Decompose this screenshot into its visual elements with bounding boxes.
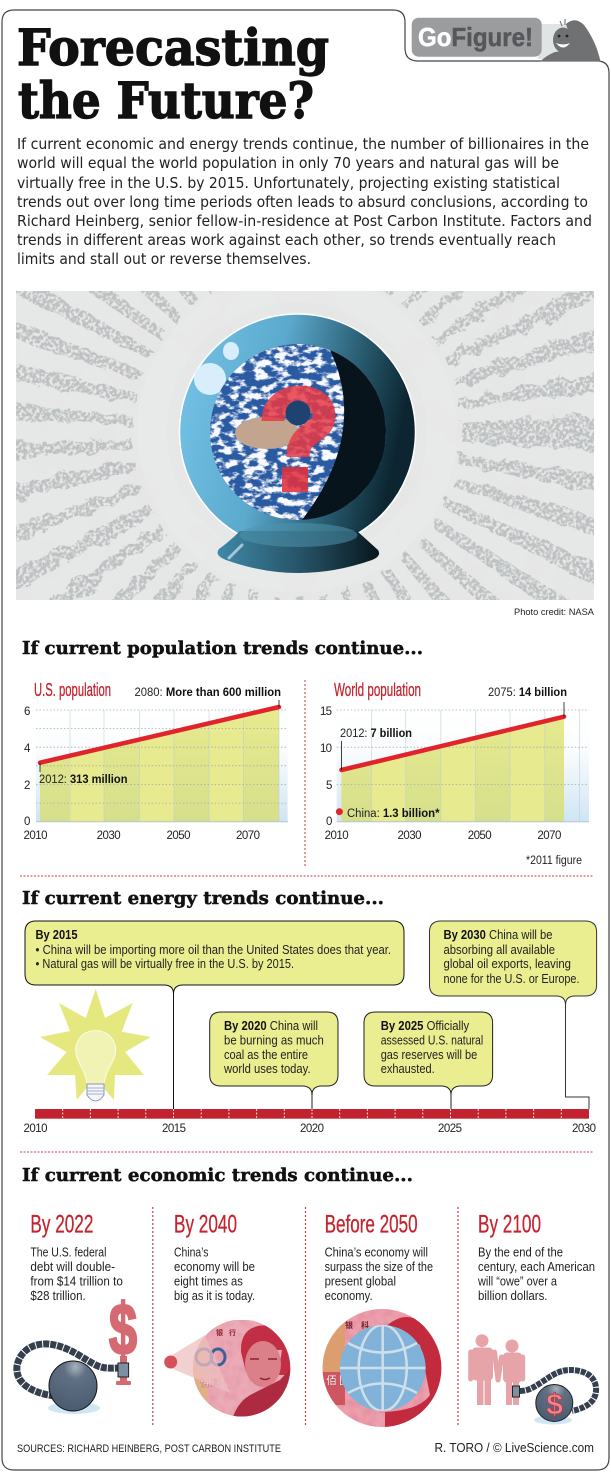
axis labels [320,706,561,842]
heading: energy: If current energy trends continue... [22,888,384,909]
panel: Before 2050: China’s economy will [325,1246,428,1260]
callout: By 2030: absorbing all available [444,943,555,957]
axis labels: 2030 [97,830,121,842]
panel: Before 2050: surpass the size of the [325,1260,433,1274]
axis labels: 2050 [166,830,190,842]
icon: globe on yuan: 佰圆 [326,1374,350,1387]
icon: light bulb [40,989,151,1101]
panel: By 2040: big as it is today. [174,1289,255,1303]
photo: crystal ball with Earth [16,291,594,600]
callout: By 2015: By 2015 [36,928,78,942]
icon: yuan magnifier: 佰圆 [200,1377,220,1388]
axis labels: 0 [24,816,30,828]
intro text block [17,135,592,268]
sources: SOURCES: RICHARD HEINBERG, POST CARBON INSTITUTE [17,1443,281,1455]
axis labels: 4 [24,743,31,755]
callout: By 2030: global oil exports, leaving [444,957,571,971]
panel: By 2022: debt will double- [30,1260,115,1274]
panel: By 2100: By 2100 [478,1211,541,1239]
panel: By 2040: By 2040 [174,1211,237,1239]
axis labels: 2030 [398,830,422,842]
callout: By 2030 [430,921,597,1109]
timeline labels: 2015 [162,1123,186,1135]
panel: Before 2050 [322,1211,442,1428]
panel: By 2100: century, each American [478,1260,595,1274]
badge: GoFigure logo [412,18,600,62]
chart title: U.S. population [34,680,111,700]
axis labels: 2010 [325,830,349,842]
panel: By 2100 [471,1211,596,1424]
callout: By 2015: • Natural gas will be virtually free in the U.S. by 2015. [36,957,294,971]
panel: By 2022: from $14 trillion to [30,1275,123,1289]
panel: By 2100: billion dollars. [478,1289,548,1303]
callout: By 2020: be burning as much [224,1034,324,1048]
earth [210,340,395,525]
panel: By 2100: will “owe” over a [477,1275,557,1289]
crystal ball base [218,523,379,573]
timeline labels: 2010 [24,1123,48,1135]
timeline labels: 2030 [572,1123,596,1135]
icon: dollar sign [109,1290,137,1385]
chart title: World population [334,680,421,700]
callout: By 2020: By 2020 China will [224,1019,318,1033]
callout: By 2030: none for the U.S. or Europe. [444,972,580,986]
timeline [24,1109,596,1135]
callout 2012: 2012: 313 million [39,774,128,786]
panel: Before 2050: present global [325,1275,396,1289]
axis labels: 0 [326,816,332,828]
callout China: China: 1.3 billion* [347,808,440,820]
panel: By 2040: economy will be [174,1260,255,1274]
callout 2080: 2080: More than 600 million [134,687,281,699]
chart: U.S. population [24,680,288,842]
title [17,18,329,130]
axis labels: 2070 [236,830,260,842]
icon: yuan magnifier [164,1320,291,1420]
icon: ball and chain with dollar [512,1370,596,1424]
callout: By 2015: • China will be importing more oil than the United States does that year. [36,943,391,957]
axis labels: 2010 [24,830,48,842]
icon: couple [471,1334,523,1405]
icon: ball and chain [17,1344,129,1414]
panel: By 2040 [164,1211,291,1420]
timeline labels [24,1123,596,1135]
callout: By 2020: coal as the entire [224,1048,308,1062]
icon: yuan magnifier: 银 行 [216,1328,236,1337]
title: the Future? [18,71,314,130]
photo credit: Photo credit: NASA [514,607,595,618]
heading: economic: If current economic trends continue... [22,1165,413,1186]
axis labels: 2070 [537,830,561,842]
callout 2075: 2075: 14 billion [488,687,567,699]
callout: By 2025: exhausted. [381,1062,435,1076]
title: Forecasting [17,18,329,77]
axis labels: 2050 [468,830,492,842]
panel: Before 2050: Before 2050 [325,1211,418,1239]
axis labels: 6 [24,706,30,718]
panel: By 2040: China’s [174,1246,208,1260]
panel: By 2040: eight times as [174,1275,243,1289]
callout: By 2025: gas reserves will be [381,1048,477,1062]
question mark [273,397,324,492]
callout: By 2025: assessed U.S. natural [381,1034,483,1048]
intro text block: virtually free in the U.S. by 2015. Unfortunately, projecting existing statistical [17,174,560,192]
panel: Before 2050: economy. [325,1289,373,1303]
icon: globe on yuan [322,1308,442,1428]
icon: ball and chain with dollar: $ [546,1388,563,1422]
intro text block: trends in different areas work against each other, so trends eventually reach [17,231,556,249]
heading: population: If current population trends continue... [22,638,423,659]
badge: GoFigure logo: GoFigure! [418,22,533,52]
intro text block: world will equal the world population in only 70 years and natural gas will be [17,154,559,172]
axis labels: 2 [24,780,30,792]
credit: R. TORO / © LiveScience.com [434,1440,594,1455]
panel: By 2100: By the end of the [478,1246,563,1260]
callout: By 2020 [210,1012,338,1109]
callout: By 2015 [25,921,404,1109]
crystal ball sphere [180,314,416,550]
axis labels: 15 [320,706,332,718]
axis labels: 5 [326,780,332,792]
timeline labels: 2020 [300,1123,324,1135]
panel: By 2022: By 2022 [30,1211,93,1239]
panel: By 2022: $28 trillion. [30,1289,86,1303]
intro text block: limits and stall out or reverse themselves. [17,250,311,268]
axis labels [24,706,260,842]
footnote: *2011 figure [526,855,582,867]
panel: By 2022 [17,1211,137,1414]
icon: dollar sign: $ [109,1290,137,1370]
callout: By 2030: By 2030 China will be [444,928,553,942]
timeline labels: 2025 [438,1123,462,1135]
callout: By 2025: By 2025 Officially [381,1019,470,1033]
callout: By 2025 [364,1012,493,1109]
axis labels: 10 [320,743,332,755]
icon: globe on yuan: 银 科 [345,1320,369,1330]
callout: By 2020: world uses today. [223,1062,311,1076]
callout 2012: 2012: 7 billion [340,728,412,740]
panel: By 2022: The U.S. federal [30,1246,106,1260]
chart: World population [320,680,589,867]
